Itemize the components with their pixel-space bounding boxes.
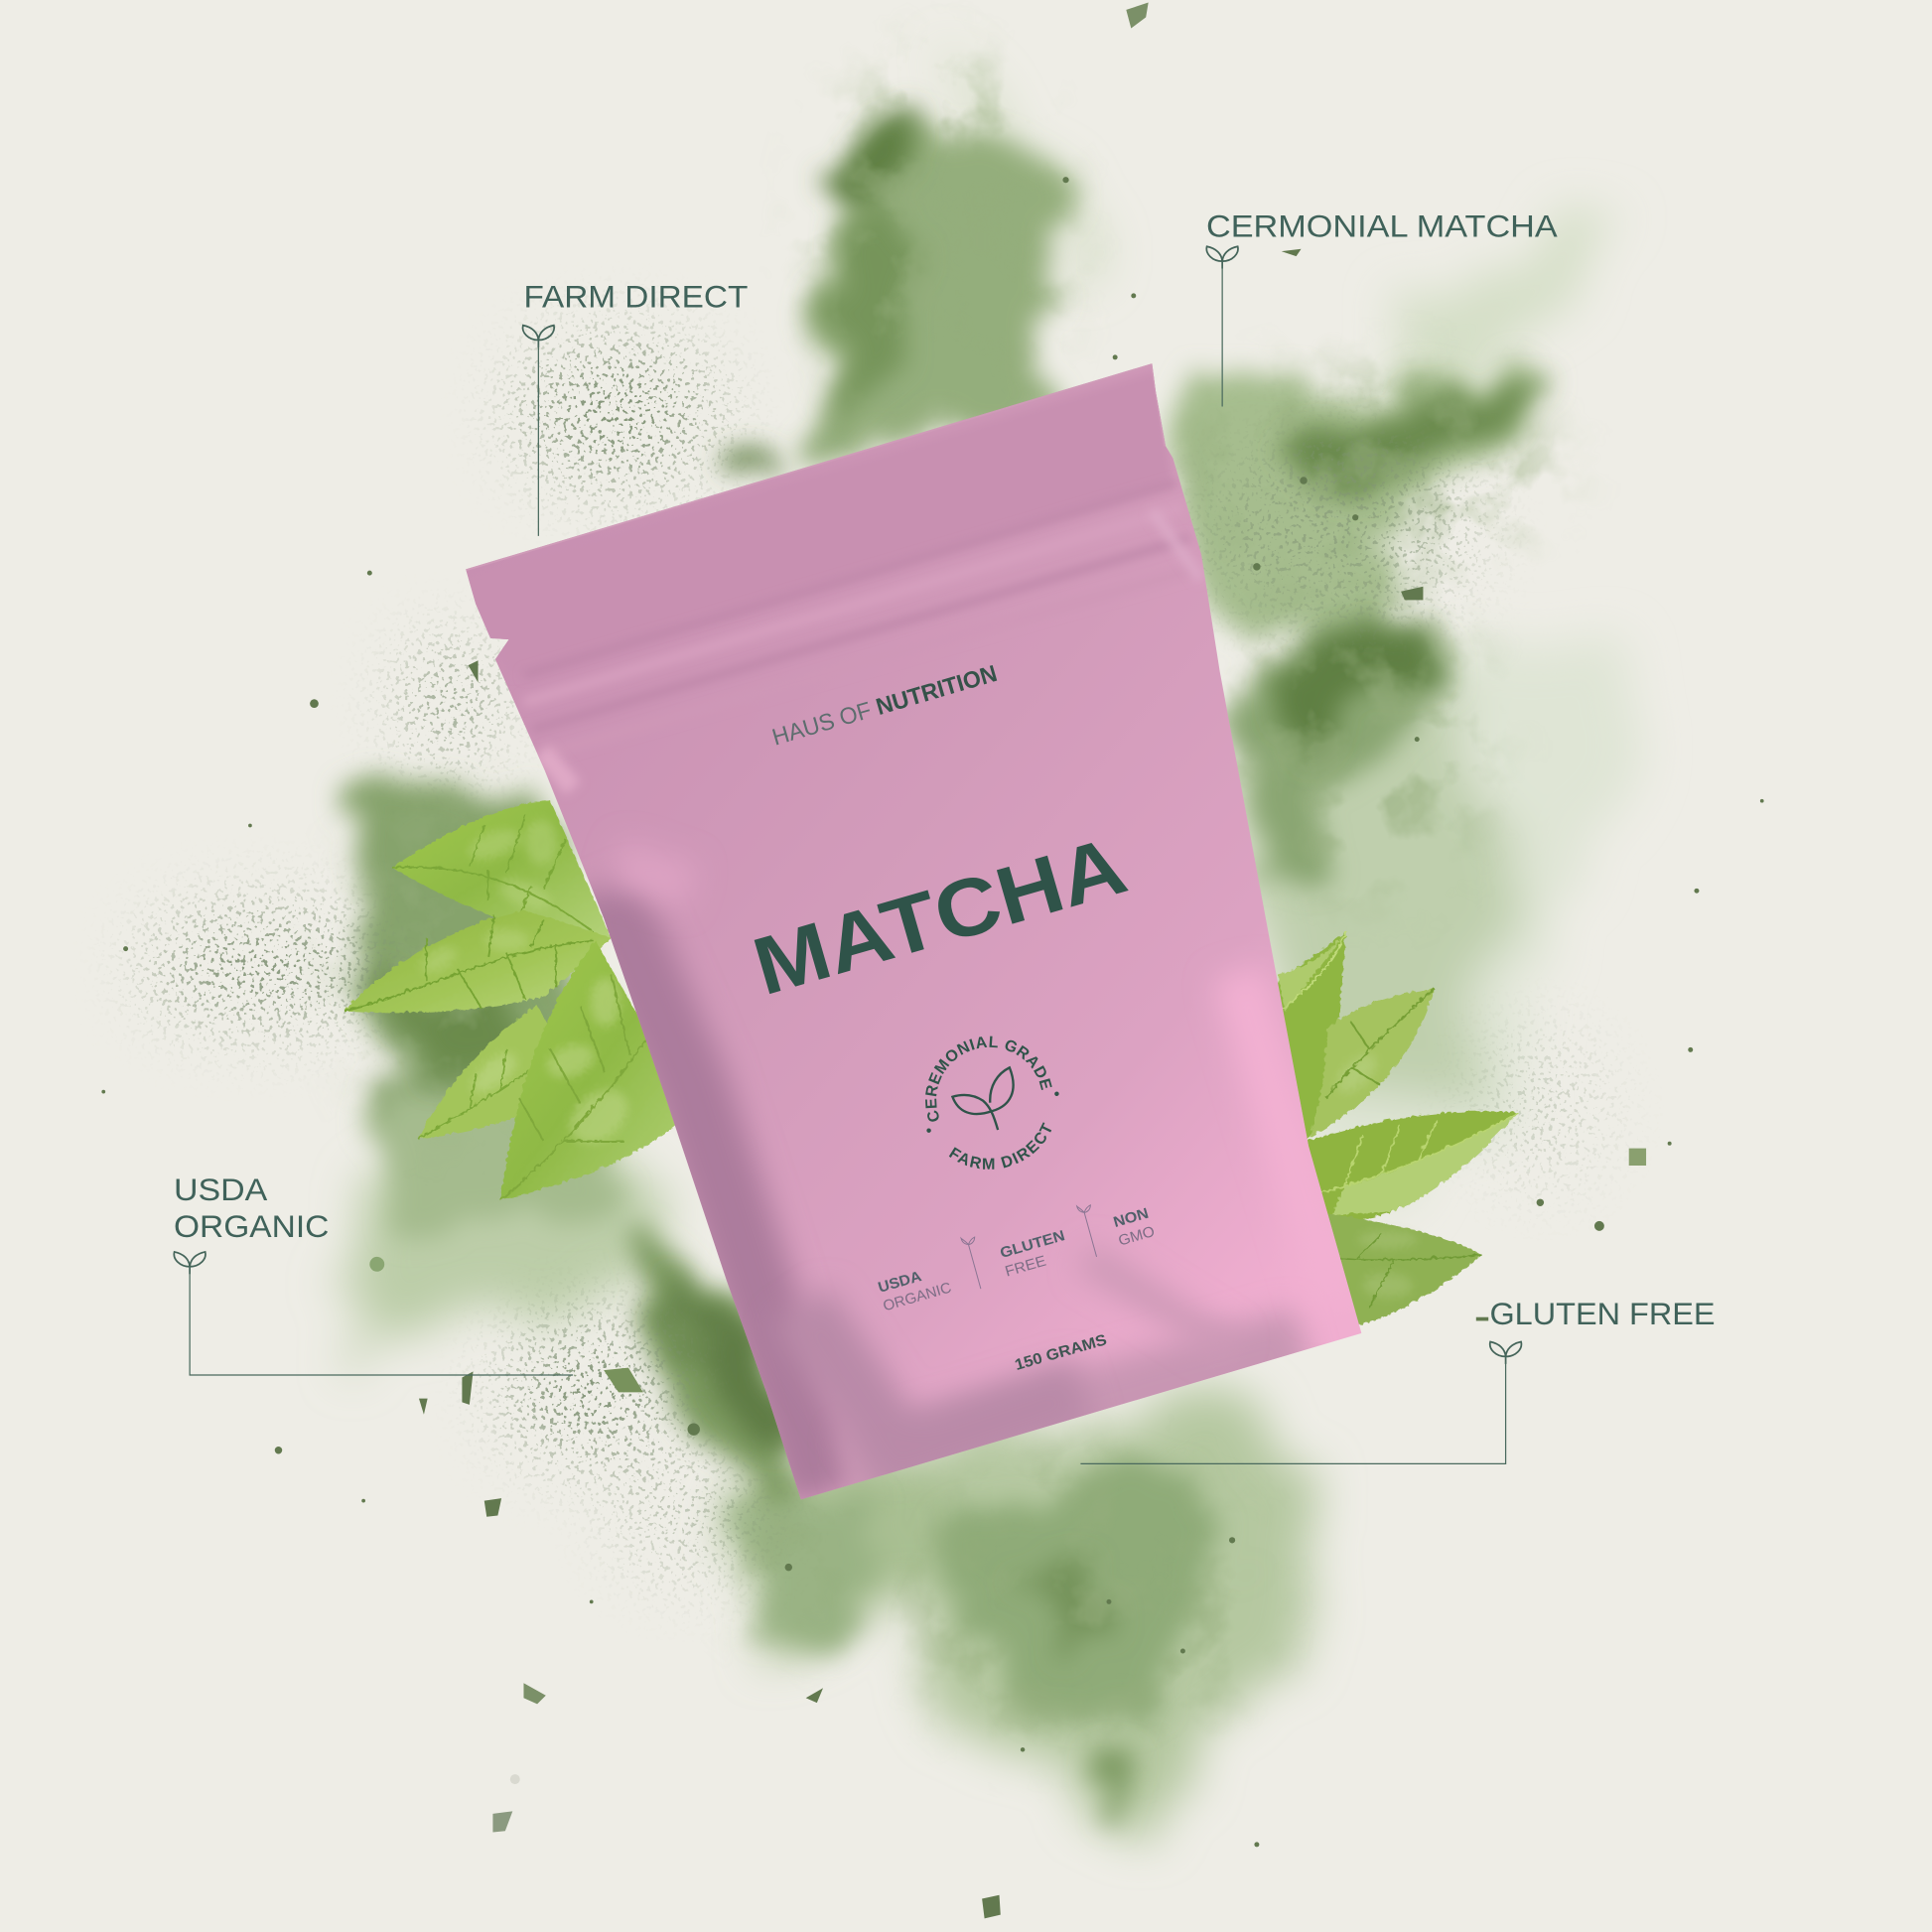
callout: farm direct bbox=[523, 280, 748, 536]
claim: usda organic: USDA bbox=[877, 1269, 923, 1297]
callout: ceremonial matcha bbox=[1206, 208, 1558, 407]
callout: farm direct: FARM DIRECT bbox=[523, 280, 748, 315]
pouch shading bbox=[466, 363, 1337, 1497]
net weight: 150 GRAMS bbox=[1013, 1331, 1109, 1374]
pouch dividers bbox=[961, 1205, 1097, 1289]
callout: usda organic: USDA bbox=[174, 1173, 268, 1207]
callout: gluten free bbox=[1080, 1297, 1716, 1463]
leaf: upper right bbox=[1309, 987, 1433, 1136]
leaf: upper left bbox=[390, 798, 610, 936]
leaf: middle left bbox=[343, 909, 610, 1011]
claim: non gmo: NON bbox=[1112, 1206, 1151, 1231]
callout: usda organic bbox=[174, 1173, 573, 1375]
badge: ceremonial grade farm direct bbox=[925, 1036, 1059, 1170]
callout: usda organic: ORGANIC bbox=[174, 1209, 329, 1244]
badge sprout bbox=[949, 1067, 1026, 1140]
matcha powder explosion bbox=[345, 37, 1651, 1842]
claim: non gmo: GMO bbox=[1117, 1224, 1157, 1250]
claim: usda organic: ORGANIC bbox=[882, 1280, 953, 1314]
powder mottling bbox=[324, 54, 1567, 1732]
pouch bbox=[466, 363, 1362, 1499]
claim: gluten free bbox=[999, 1228, 1067, 1281]
leaf: tall right bbox=[1269, 930, 1345, 1140]
callout: ceremonial matcha: CERMONIAL MATCHA bbox=[1206, 208, 1558, 243]
claim: non gmo bbox=[1112, 1206, 1157, 1250]
powder speckles bbox=[111, 294, 1624, 1606]
tea leaves: right cluster bbox=[1269, 930, 1517, 1330]
leaf: lower right bbox=[1320, 1211, 1480, 1330]
claim: gluten free: GLUTEN bbox=[999, 1228, 1067, 1262]
claim: usda organic bbox=[877, 1269, 953, 1314]
leaf: large left bbox=[499, 939, 690, 1199]
leaf: long right bbox=[1307, 1110, 1517, 1220]
pouch body bbox=[466, 363, 1362, 1499]
tea leaves: left cluster bbox=[343, 798, 690, 1199]
callout: gluten free: GLUTEN FREE bbox=[1489, 1297, 1716, 1331]
claim: gluten free: FREE bbox=[1004, 1254, 1048, 1281]
product name: MATCHA bbox=[744, 820, 1136, 1013]
badge: ceremonial grade farm direct: CEREMONIAL GRADE bbox=[925, 1036, 1052, 1122]
badge: ceremonial grade farm direct: FARM DIRECT bbox=[949, 1122, 1052, 1170]
leaf: small left bbox=[416, 1004, 579, 1138]
brand line: HAUS OF NUTRITION bbox=[769, 660, 1000, 751]
